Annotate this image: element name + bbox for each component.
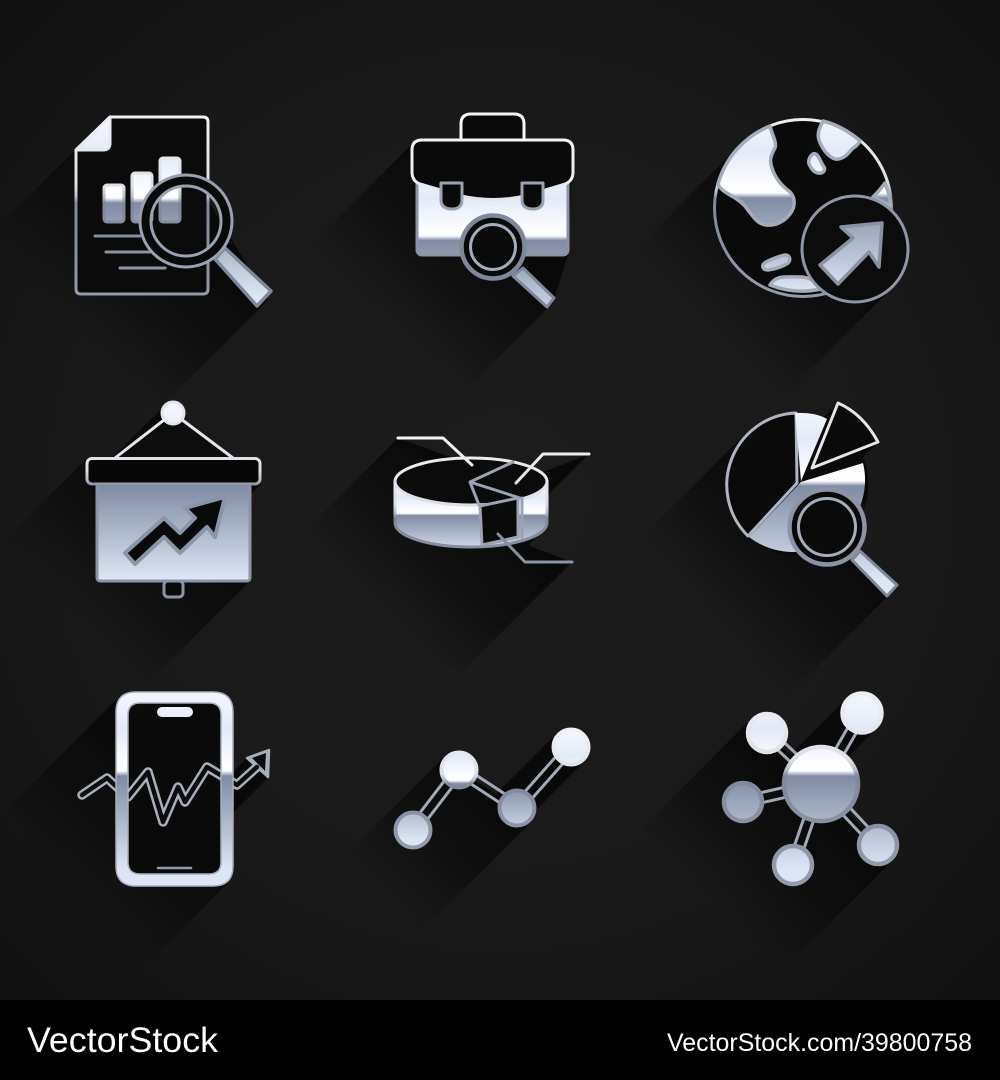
text lines bbox=[95, 236, 165, 268]
detached wedge bbox=[812, 403, 878, 468]
bar chart bbox=[104, 158, 180, 222]
icon: globe with arrow badge bbox=[714, 120, 908, 302]
icon: line chart with nodes bbox=[396, 730, 588, 848]
nodes bbox=[396, 730, 588, 848]
icon: briefcase with magnifier bbox=[412, 114, 573, 307]
magnifier bbox=[790, 490, 897, 596]
magnifier bbox=[462, 216, 554, 307]
hub bbox=[784, 747, 858, 821]
rising arrow bbox=[125, 497, 225, 564]
icon: presentation board with rising arrow bbox=[87, 402, 260, 597]
notch bbox=[157, 707, 193, 717]
icon: document with bar chart and magnifier bbox=[76, 117, 271, 306]
home bar bbox=[158, 867, 191, 869]
icon: pie chart with detached wedge and magnifier bbox=[726, 403, 897, 596]
satellites bbox=[724, 694, 897, 884]
icon: smartphone with stock line bbox=[82, 692, 269, 886]
stock line bbox=[82, 750, 269, 822]
footer bar bbox=[0, 1000, 1000, 1080]
continents bbox=[718, 121, 891, 291]
phone frame bbox=[116, 692, 233, 886]
long shadows behind icons bbox=[0, 133, 893, 992]
icon: network hub with satellites bbox=[724, 694, 897, 884]
arrow badge bbox=[802, 196, 908, 302]
extracted slice bbox=[470, 462, 522, 545]
brand wordmark: VectorStock bbox=[27, 1021, 219, 1060]
magnifier bbox=[140, 175, 271, 306]
icon: 3D pie chart with leader lines bbox=[395, 438, 589, 562]
image id: VectorStock.com/39800758 bbox=[667, 1029, 972, 1057]
leader lines bbox=[398, 438, 589, 562]
straps bbox=[441, 183, 543, 209]
